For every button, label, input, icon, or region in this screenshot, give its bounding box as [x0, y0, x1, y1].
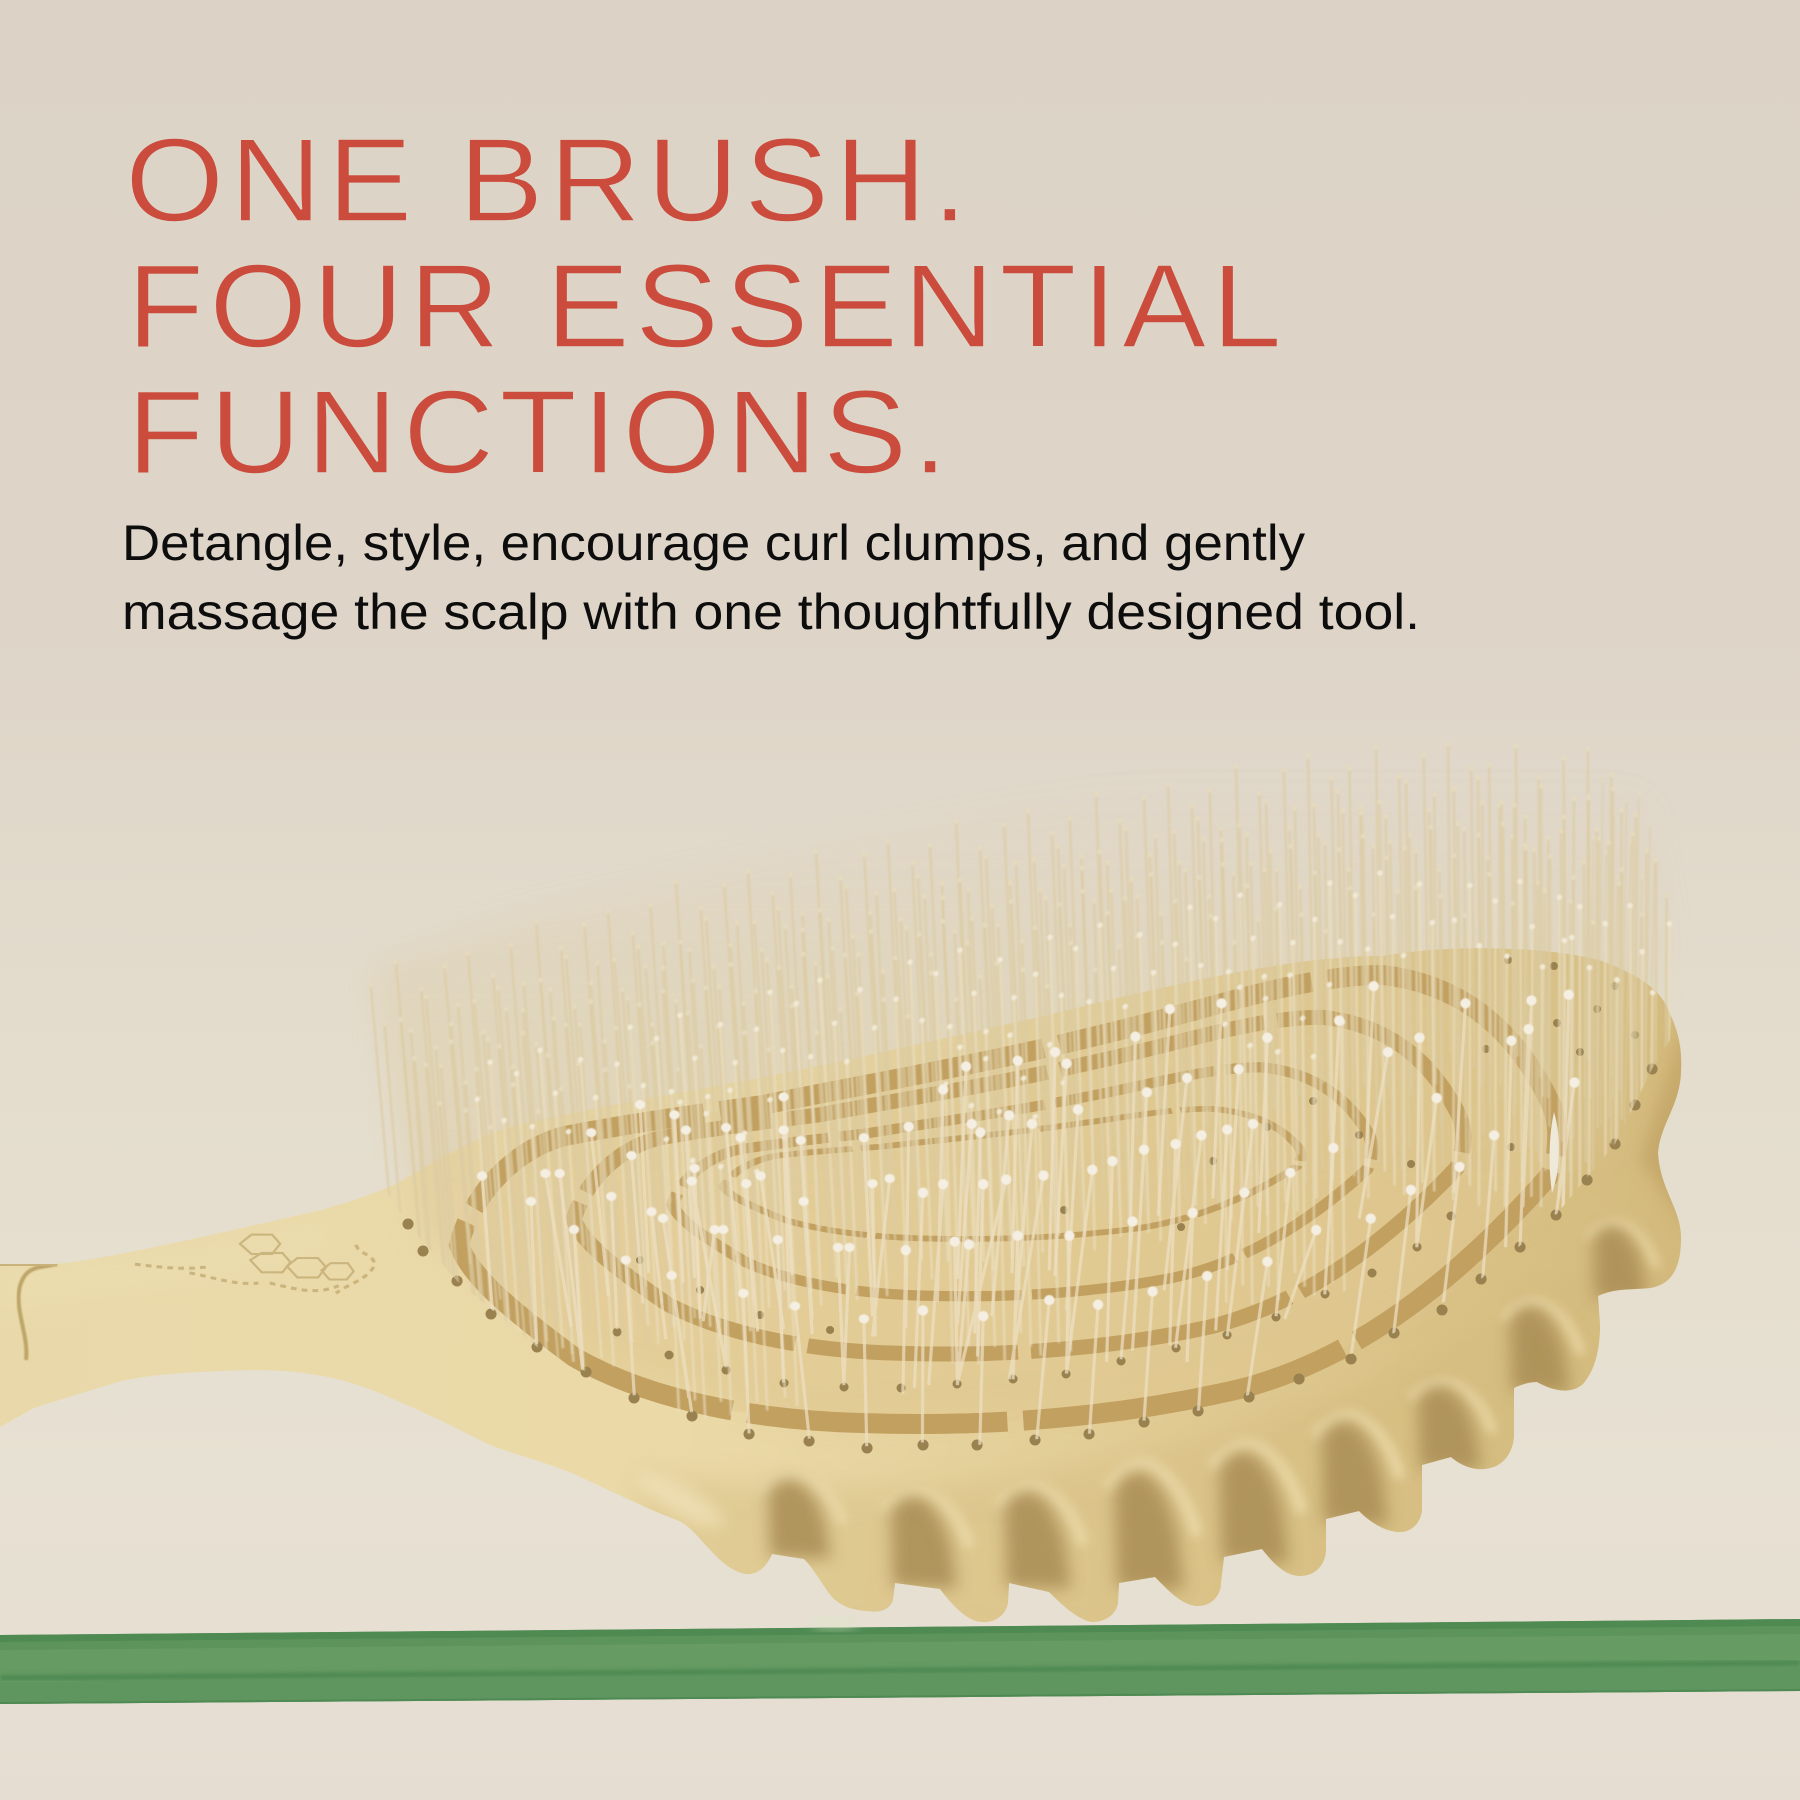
right side cutout [1550, 1112, 1559, 1193]
tooth shadows [768, 1226, 1647, 1590]
bristle holes [408, 960, 1652, 1448]
tooth ridge highlights [761, 1223, 1656, 1547]
subheading text: massage the scalp with one thoughtfully designed tool. [122, 584, 1420, 640]
front bristles with beaded tips [482, 986, 1575, 1446]
back bristles [370, 742, 1694, 1424]
title [125, 114, 1287, 499]
slotted rings [459, 975, 1557, 1424]
brush body with teeth and handle [0, 930, 1710, 1640]
title: ONE BRUSH. [125, 114, 973, 247]
title: FOUR ESSENTIAL [127, 240, 1287, 373]
honeycomb logo relief [135, 1235, 374, 1293]
bristle haze [370, 745, 1665, 1420]
head interior tone [459, 975, 1557, 1424]
subheading text [122, 515, 1420, 640]
subheading text: Detangle, style, encourage curl clumps, and gently [122, 515, 1305, 571]
handle groove [19, 1264, 57, 1360]
title: FUNCTIONS. [127, 366, 953, 499]
green bar [0, 1618, 1800, 1704]
brush [0, 742, 1710, 1640]
